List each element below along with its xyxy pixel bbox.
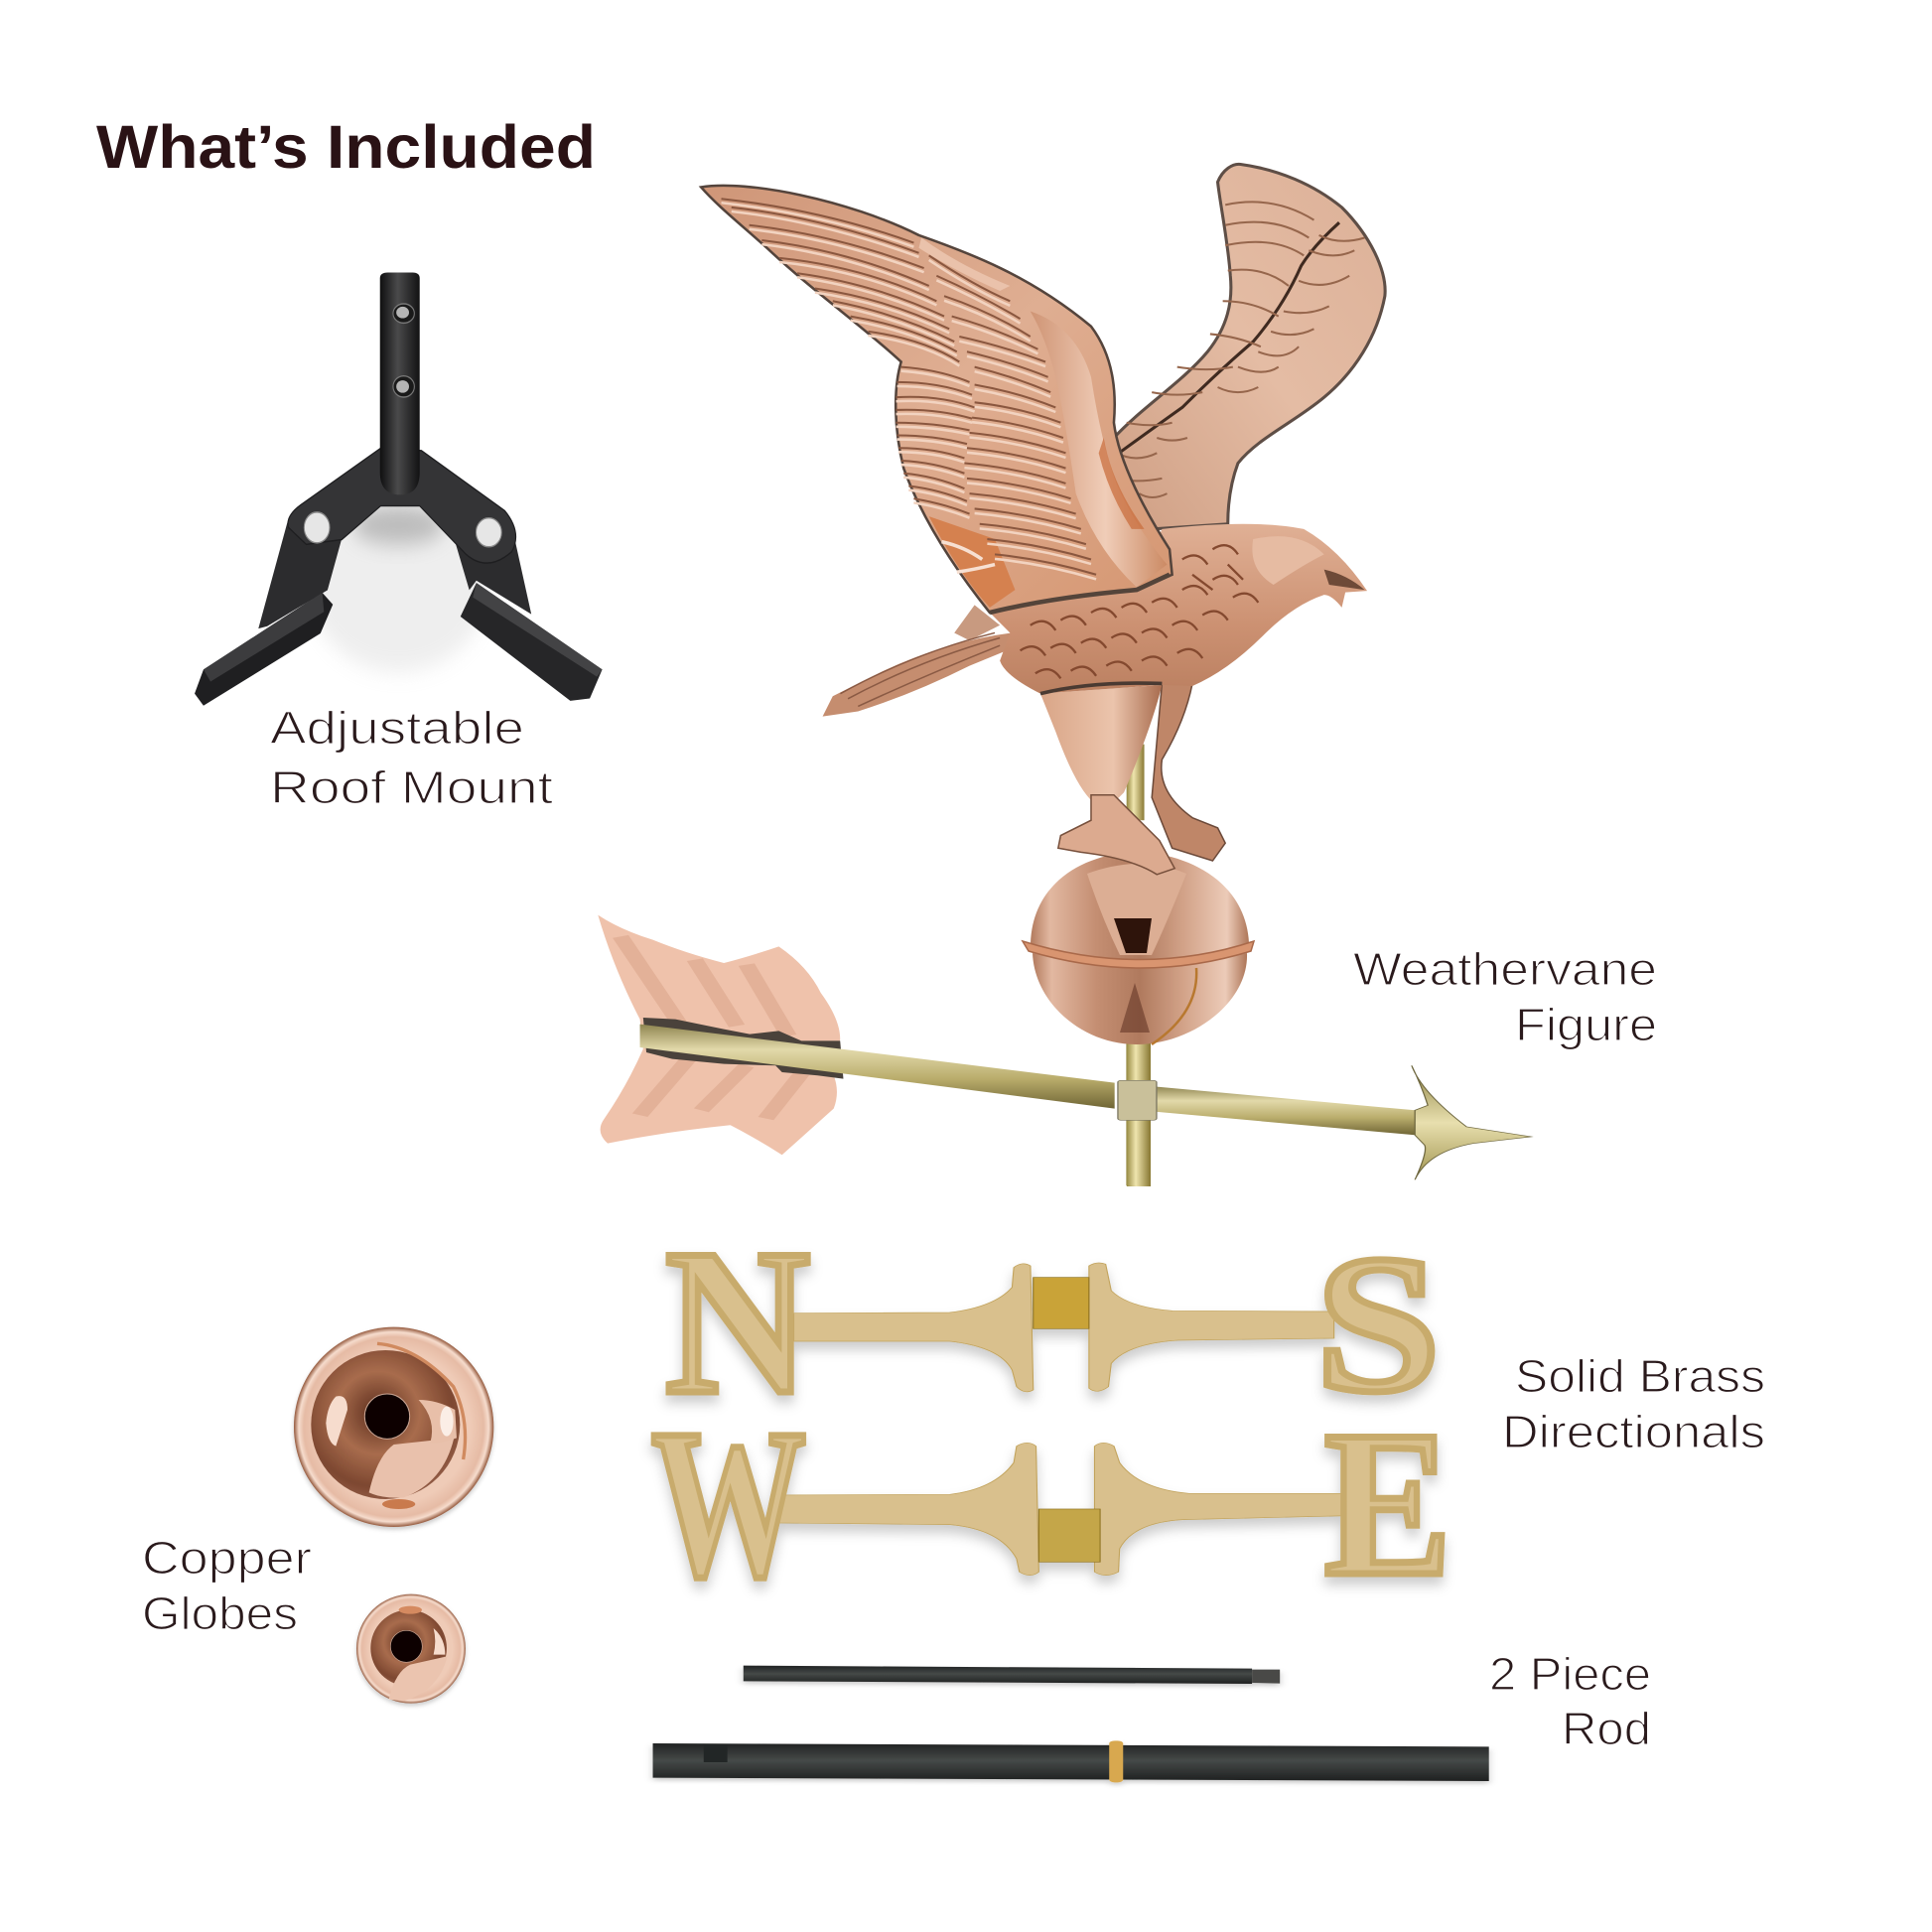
large globe reflections [369,1438,454,1498]
N-S arms [794,1263,1334,1392]
shaft front [1150,1086,1415,1135]
label: adjustable roof mount: Roof Mount [270,761,553,813]
globe lower hemisphere [1033,953,1247,1044]
leading wing edge [1031,311,1168,588]
letter S: S [1315,1215,1441,1433]
icon: lower rod [653,1740,1489,1782]
label: solid brass directionals: Solid Brass [1515,1350,1765,1402]
small globe reflections [389,1656,448,1701]
icon: arrow fletching [598,915,840,1155]
label: copper globes: Globes [142,1587,298,1639]
copper underside feathers [929,516,1015,608]
letter N: N [665,1207,810,1438]
icon: N-S directional [665,1207,1441,1438]
collar [1118,1080,1157,1120]
rod below vane [1126,1042,1150,1185]
icon: upper rod [744,1666,1280,1684]
eagle front thigh [1040,685,1162,802]
icon: small copper globe [356,1594,466,1704]
mount screws [304,304,501,547]
primary feathers [722,199,975,518]
label: copper globes: Copper [142,1532,312,1584]
label: adjustable roof mount [270,702,553,813]
mount tube [380,272,420,494]
label: solid brass directionals [1502,1350,1765,1457]
mount arms [258,506,531,628]
label: 2 piece rod [1489,1648,1651,1754]
label: weathervane figure: Figure [1515,999,1657,1050]
shaft tarnish edge [643,1018,843,1079]
icon: arrow shaft and head [640,1018,1531,1185]
arrow head [1412,1065,1531,1179]
secondary coverts [929,255,1096,579]
icon: large copper globe [294,1327,493,1527]
eagle rear leg [1152,683,1225,861]
letter W: W [651,1386,806,1621]
globe upper hemisphere [1031,852,1249,961]
letter E: E [1324,1389,1451,1619]
eagle pole [1127,745,1145,820]
label: weathervane figure [1353,943,1657,1050]
mount yoke [288,448,516,563]
icon: weathervane globe [1023,852,1254,1044]
globe seam [1023,941,1254,968]
globe reflections [1087,864,1186,955]
title: What’s Included [96,113,596,181]
eagle far wing [1114,164,1385,529]
label: copper globes [142,1532,312,1639]
label: adjustable roof mount: Adjustable [270,702,524,754]
mount shadow [306,489,490,672]
icon: W-E directional [651,1386,1451,1621]
label: solid brass directionals: Directionals [1502,1406,1765,1457]
icon: eagle [701,164,1385,875]
label: 2 piece rod: 2 Piece [1489,1648,1651,1700]
icon: adjustable roof mount [195,272,603,706]
brass ring [1109,1740,1123,1782]
W-E arms [771,1443,1351,1576]
label: 2 piece rod: Rod [1562,1703,1651,1754]
shaft rear [640,1025,1115,1109]
eagle near wing [701,186,1173,613]
mount feet [195,583,603,706]
eagle scales [1021,545,1258,678]
label: weathervane figure: Weathervane [1353,943,1657,995]
eagle body and head [990,524,1367,694]
eagle foot [1058,795,1174,875]
icon: brass mast under globe [1127,1033,1151,1186]
eagle tail [823,605,1013,717]
